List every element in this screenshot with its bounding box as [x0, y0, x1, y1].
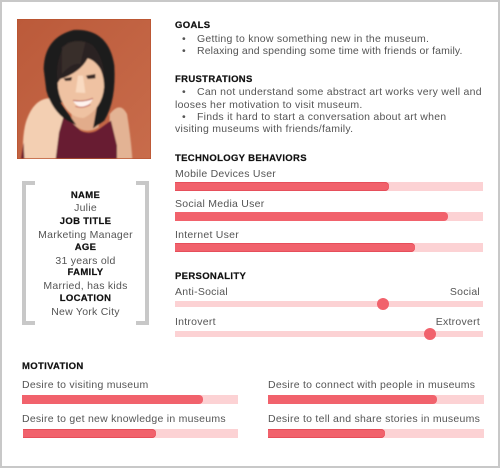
heading: technology behaviors: TECHNOLOGY BEHAVIORS — [175, 153, 307, 164]
heading: personality: PERSONALITY — [175, 271, 246, 282]
goals list: • — [182, 45, 186, 57]
bar: social media — [175, 212, 483, 221]
heading: motivation: MOTIVATION — [22, 361, 84, 372]
bar: mobile devices — [175, 182, 483, 191]
label: tell and share stories: Desire to tell and share stories in museums — [268, 413, 480, 425]
frustrations list — [175, 86, 482, 135]
bar: internet — [175, 243, 483, 252]
profile panel with brackets: Julie — [74, 202, 97, 214]
frustrations list: Finds it hard to start a conversation about art when — [197, 111, 446, 123]
slider: introvert to extrovert — [175, 331, 483, 337]
label: visiting museum: Desire to visiting museum — [22, 379, 148, 391]
goals list: • — [182, 33, 186, 45]
frustrations list: • — [182, 86, 186, 98]
bar: connect with people — [268, 395, 484, 404]
label: anti-social: Anti-Social — [175, 286, 228, 298]
profile panel with brackets: 31 years old — [55, 255, 116, 267]
left bracket — [22, 181, 35, 325]
slider: anti-social to social — [175, 301, 483, 307]
label: extrovert: Extrovert — [436, 316, 480, 328]
profile panel with brackets: Marketing Manager — [38, 229, 133, 241]
bar: visiting museum — [22, 395, 238, 404]
heading: goals: GOALS — [175, 20, 210, 31]
label: mobile devices: Mobile Devices User — [175, 168, 276, 180]
frustrations list: visiting museums with friends/family. — [175, 123, 353, 135]
profile panel with brackets: New York City — [51, 306, 120, 318]
profile panel with brackets: JOB TITLE — [60, 216, 111, 227]
label: introvert: Introvert — [175, 316, 216, 328]
goals list: Relaxing and spending some time with friends or family. — [197, 45, 463, 57]
label: social: Social — [450, 286, 480, 298]
bar: new knowledge — [23, 429, 238, 438]
profile panel with brackets: FAMILY — [68, 267, 103, 278]
heading: frustrations: FRUSTRATIONS — [175, 74, 253, 85]
frustrations list: • — [182, 111, 186, 123]
profile panel with brackets: Married, has kids — [43, 280, 128, 292]
photo: portrait of Julie — [17, 19, 151, 159]
frustrations list: looses her motivation to visit museum. — [175, 99, 362, 111]
label: connect with people: Desire to connect with people in museums — [268, 379, 475, 391]
profile panel with brackets: AGE — [75, 242, 96, 253]
name: NAME — [71, 190, 100, 201]
profile panel with brackets: LOCATION — [60, 293, 111, 304]
goals list — [182, 33, 463, 57]
label: social media: Social Media User — [175, 198, 264, 210]
goals list: Getting to know something new in the museum. — [197, 33, 429, 45]
label: new knowledge: Desire to get new knowledge in museums — [22, 413, 226, 425]
bar: tell and share stories — [268, 429, 484, 438]
label: internet: Internet User — [175, 229, 239, 241]
frustrations list: Can not understand some abstract art works very well and — [197, 86, 482, 98]
profile panel with brackets — [22, 181, 149, 325]
right bracket — [136, 181, 149, 325]
